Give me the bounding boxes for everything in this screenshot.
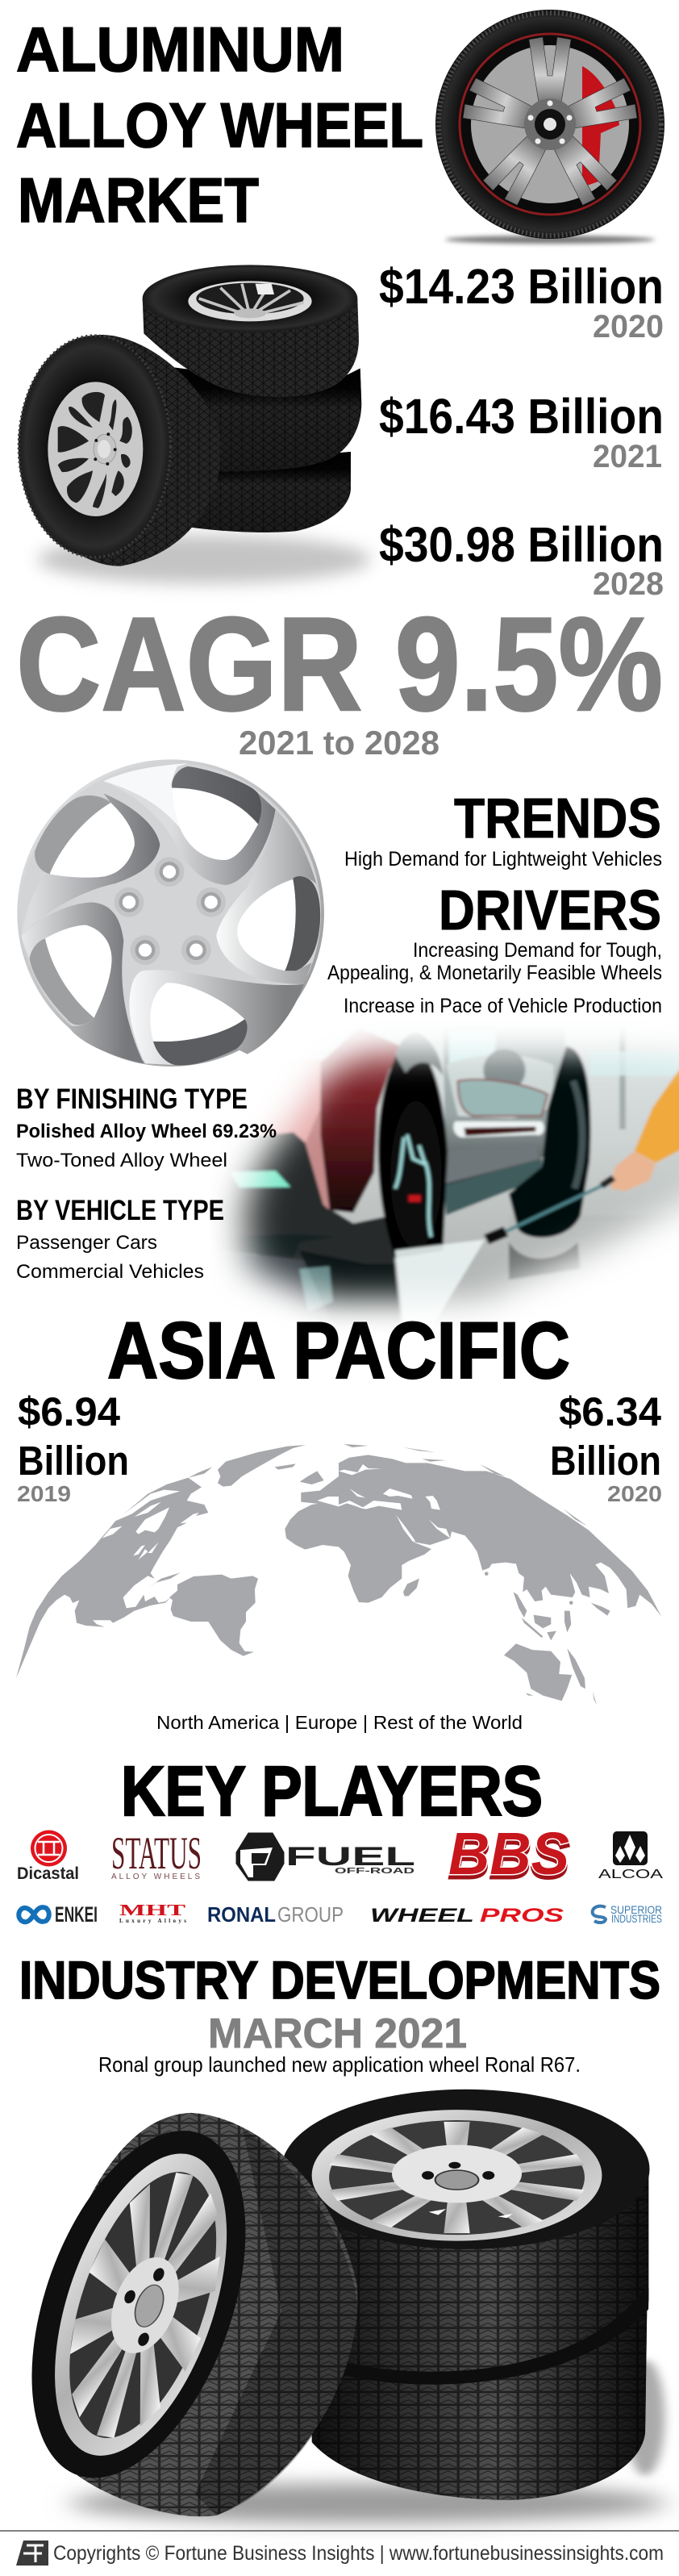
logo: MHT: Luxury Alloys (119, 1918, 186, 1924)
drivers text: Increasing Demand for Tough, (413, 939, 662, 962)
stat: Asia Pacific 2020: $6.34 (559, 1389, 661, 1434)
development date: MARCH 2021 (208, 2010, 467, 2057)
logo: Superior Industries: INDUSTRIES (611, 1912, 662, 1925)
logo: Status: ALLOY WHEELS (111, 1873, 200, 1881)
development text: Ronal group launched new application wheel Ronal R67. (98, 2052, 581, 2077)
stat: Asia Pacific 2020: Billion (550, 1438, 661, 1484)
logo: Fuel Off-Road: OFF-ROAD (335, 1867, 414, 1876)
logo: Dicastal: Dicastal (17, 1864, 79, 1883)
value 2028: 2028 (593, 566, 664, 602)
logo: Wheel Pros: WHEEL (370, 1905, 474, 1927)
vehicle type block: BY VEHICLE TYPE (16, 1195, 224, 1226)
stat: Asia Pacific 2019: Billion (18, 1438, 129, 1484)
logo: Alcoa (598, 1831, 663, 1881)
value 2021: 2021 (593, 439, 662, 474)
photo: car wash (218, 1031, 679, 1326)
stat: Asia Pacific 2020 (550, 1389, 662, 1506)
world map (16, 1444, 661, 1705)
drivers text (327, 939, 662, 1017)
footer logo (16, 2541, 48, 2566)
finishing type block: Two-Toned Alloy Wheel (16, 1150, 227, 1171)
logo: Ronal Group (207, 1902, 344, 1927)
value 2028 (379, 517, 664, 602)
other regions: North America | Europe | Rest of the World (156, 1712, 523, 1733)
vehicle type block (16, 1195, 224, 1283)
logo: Enkei (19, 1902, 98, 1927)
CAGR period: 2021 to 2028 (239, 724, 439, 762)
logo: BBS: BBS (448, 1820, 569, 1887)
logo: Enkei: ENKEI (55, 1902, 98, 1927)
logo: Status (111, 1828, 202, 1881)
logo: MHT: MHT (119, 1902, 186, 1919)
stat: Asia Pacific 2020: 2020 (607, 1481, 662, 1506)
icon: four tires (0, 2090, 667, 2523)
value 2020: 2020 (593, 309, 664, 344)
logo: Wheel Pros: PROS (480, 1905, 564, 1927)
logo: Dicastal (17, 1830, 79, 1883)
logo: Ronal Group: RONAL (207, 1902, 276, 1927)
title: ALLOY WHEEL (16, 90, 423, 161)
logo: Wheel Pros (370, 1905, 564, 1927)
logo: Alcoa: ALCOA (598, 1868, 663, 1881)
vehicle type block: Passenger Cars (16, 1232, 157, 1254)
logo: Fuel Off-Road: FUEL (285, 1842, 415, 1871)
logo: BBS: BBS (448, 1824, 569, 1891)
logo: Superior Industries (593, 1903, 662, 1925)
value 2021 (379, 389, 664, 474)
title (16, 14, 423, 236)
stat: Asia Pacific 2019: $6.94 (18, 1389, 120, 1434)
logo: Fuel Off-Road (236, 1833, 415, 1881)
finishing type block: Polished Alloy Wheel 69.23% (16, 1121, 277, 1142)
finishing type block (16, 1083, 277, 1171)
icon: hubcap (19, 761, 323, 1065)
finishing type block: BY FINISHING TYPE (16, 1083, 248, 1115)
stat: Asia Pacific 2019: 2019 (17, 1481, 71, 1506)
icon: stack of tires (19, 265, 371, 583)
logo: Superior Industries: SUPERIOR (610, 1903, 662, 1916)
footer divider (0, 2530, 679, 2532)
trends text: High Demand for Lightweight Vehicles (344, 848, 662, 870)
value 2020 (379, 259, 664, 344)
region heading: ASIA PACIFIC (107, 1305, 570, 1395)
title: ALUMINUM (16, 14, 344, 85)
logo: Status: STATUS (111, 1828, 202, 1879)
icon: red caliper wheel (435, 10, 664, 244)
stat: Asia Pacific 2019 (17, 1389, 129, 1506)
drivers text: Increase in Pace of Vehicle Production (344, 995, 662, 1017)
title: MARKET (18, 165, 259, 236)
logo: Ronal Group: GROUP (277, 1902, 344, 1927)
key players heading: KEY PLAYERS (121, 1752, 543, 1831)
logo: MHT (119, 1902, 186, 1924)
vehicle type block: Commercial Vehicles (16, 1261, 204, 1283)
